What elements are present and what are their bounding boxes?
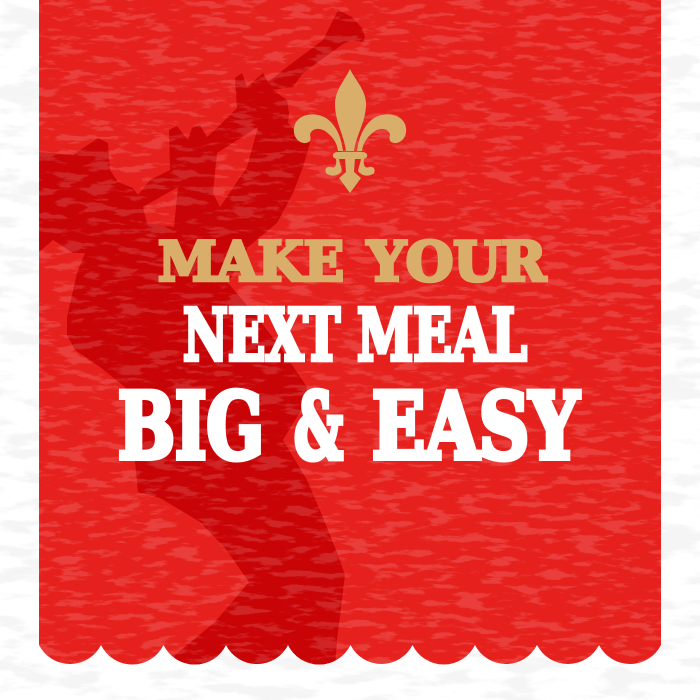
silhouette: trumpet player xyxy=(39,10,365,670)
icon: gold fleur-de-lis xyxy=(294,69,406,193)
heading: NEXT MEAL xyxy=(183,293,527,377)
heading: BIG & EASY xyxy=(118,374,580,480)
heading: NEXT MEAL: NEXT xyxy=(183,293,340,377)
heading: NEXT MEAL: MEAL xyxy=(357,293,527,377)
heading: MAKE YOUR xyxy=(158,229,547,293)
heading: BIG & EASY: EASY xyxy=(372,374,580,480)
heading: BIG & EASY: BIG xyxy=(118,374,264,480)
heading: MAKE YOUR: YOUR xyxy=(366,229,547,293)
heading: MAKE YOUR: MAKE xyxy=(158,229,344,293)
heading: BIG & EASY: & xyxy=(294,374,343,480)
